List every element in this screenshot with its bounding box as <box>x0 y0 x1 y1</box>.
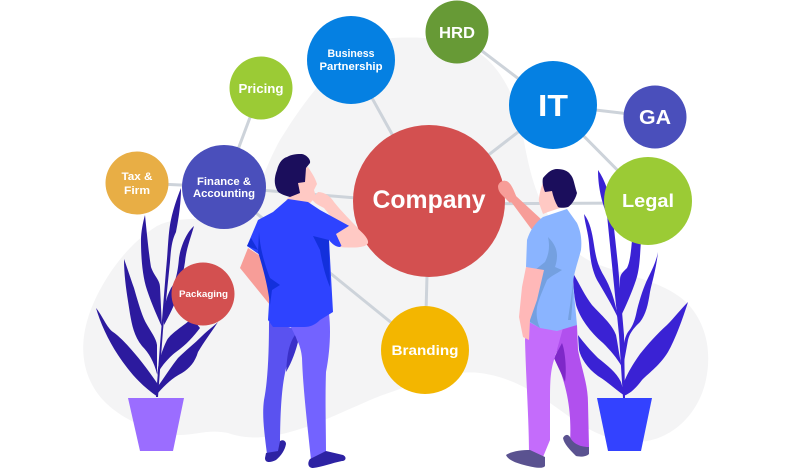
forearm and hand <box>312 192 368 248</box>
node: Company <box>353 125 505 277</box>
node: IT: IT <box>538 88 568 123</box>
node: Finance and Accounting: Accounting <box>193 188 255 200</box>
front leg <box>525 322 563 457</box>
node: Packaging <box>172 262 234 326</box>
right man's hand over Company <box>498 181 516 203</box>
node: Branding: Branding <box>392 342 458 358</box>
node: Finance and Accounting: Finance & <box>197 176 251 188</box>
front shoe <box>506 450 545 468</box>
node: Tax and Firm: Firm <box>124 185 150 197</box>
shirt <box>247 199 353 327</box>
left man's hand over Company <box>336 224 368 248</box>
hair <box>543 169 577 208</box>
node: GA <box>624 86 686 148</box>
front arm <box>519 267 544 340</box>
pot: right <box>597 398 652 451</box>
pointing arm <box>498 181 542 230</box>
node: Pricing <box>230 56 292 120</box>
leg crease <box>286 335 298 372</box>
face and neck <box>539 183 560 214</box>
node: IT <box>509 61 597 149</box>
node: HRD <box>426 0 488 64</box>
hair <box>275 154 310 197</box>
shirt shading <box>527 237 562 328</box>
node: Tax and Firm <box>106 152 168 214</box>
front leg <box>290 314 330 460</box>
node: Business Partnership <box>307 16 395 104</box>
man: right, pointing <box>498 169 589 468</box>
back leg <box>556 325 589 447</box>
plant: left <box>96 188 218 451</box>
node: Tax and Firm: Tax & <box>122 171 153 183</box>
shirt shading <box>247 232 330 305</box>
back shoe <box>265 440 286 462</box>
node: Packaging: Packaging <box>179 289 228 300</box>
leg crease <box>554 343 566 382</box>
background blob <box>83 37 708 442</box>
front shoe <box>308 451 346 468</box>
back shoe <box>563 435 589 457</box>
neck and face <box>286 167 317 203</box>
connector lines <box>137 32 655 350</box>
node: Legal <box>604 157 692 245</box>
man: left, thinking <box>240 154 368 468</box>
node: Pricing: Pricing <box>238 81 284 96</box>
node: Business Partnership: Business <box>328 48 374 60</box>
pot: left <box>128 398 184 451</box>
leaves: left plant <box>96 188 218 397</box>
back leg <box>263 322 300 454</box>
node: HRD: HRD <box>439 25 475 42</box>
node: Business Partnership: Partnership <box>320 61 383 73</box>
node: GA: GA <box>639 107 671 129</box>
shirt <box>526 209 581 331</box>
shirt wrinkle <box>568 283 573 320</box>
node: Branding <box>381 306 469 394</box>
back arm <box>240 248 272 305</box>
leaves: right plant <box>573 170 688 398</box>
node: Legal: Legal <box>622 191 674 211</box>
plant: right <box>573 170 688 451</box>
node: Finance and Accounting <box>182 145 266 229</box>
node: Company: Company <box>372 186 486 214</box>
